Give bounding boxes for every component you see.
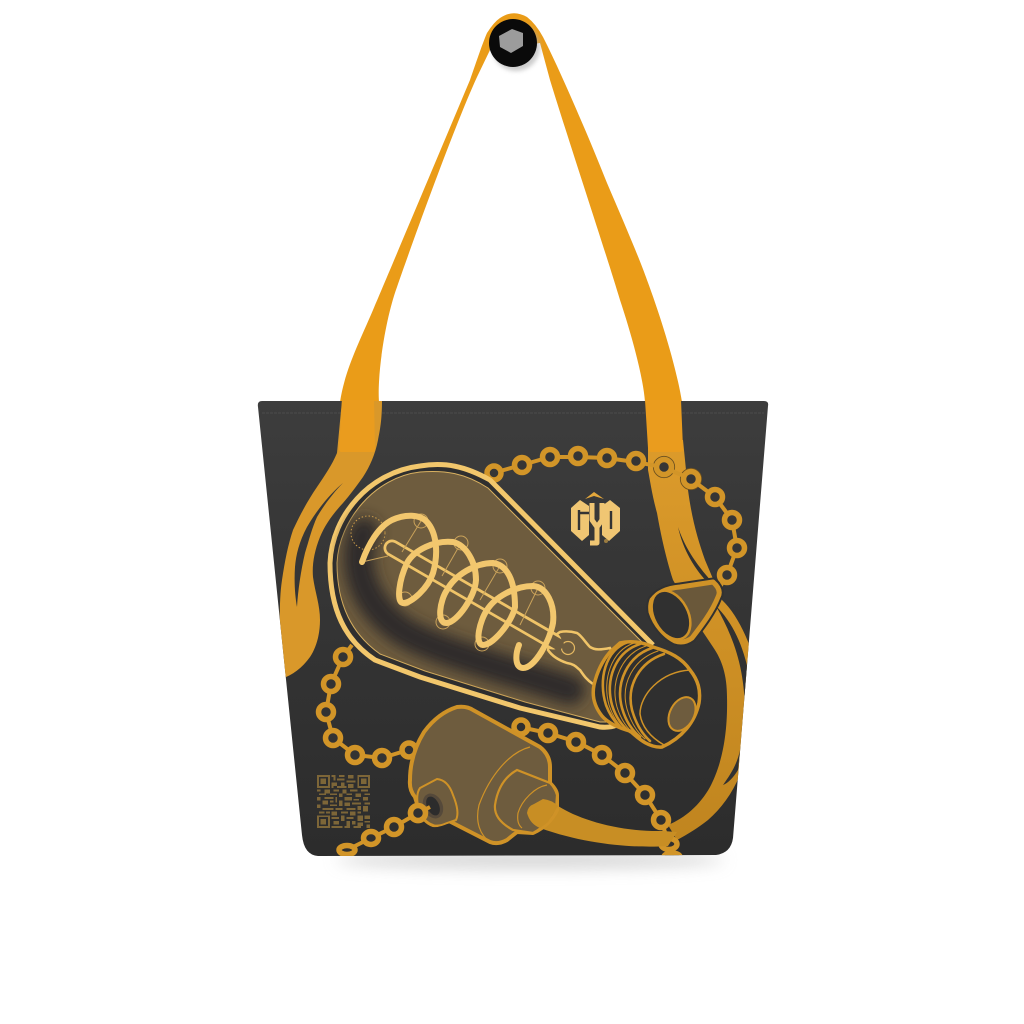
socket end cylinder [417,779,457,826]
right strap patch [645,400,683,452]
screw threads [603,642,690,745]
logo [571,492,620,543]
bulb glass [330,465,653,727]
peg [489,19,540,71]
light bulb [330,465,701,747]
chain: top [487,448,744,587]
ribbon slits [678,527,750,785]
strap: shoulder loop [340,13,682,402]
base contact [668,696,696,732]
filament rod [392,548,558,644]
filament support lines [351,514,545,651]
bag body [258,401,768,856]
chain: left [318,645,416,766]
screw base [593,642,700,747]
printed artwork [262,400,764,861]
filament coil [362,516,553,668]
left ribbon cable [270,400,382,679]
cone pendant [644,582,719,646]
stem ring [562,642,574,654]
chain: bottom left [339,806,430,854]
glass stem [548,631,612,684]
ground shadow [335,852,725,868]
cable into socket [543,806,676,847]
bulb inner shadow [358,532,570,690]
chain: bottom right [514,720,680,861]
right ribbon cable [648,440,760,840]
socket [410,707,558,843]
QR code [317,775,370,828]
tote bag illustration [258,13,768,875]
left strap patch [339,400,375,452]
bulb interior [337,471,650,722]
